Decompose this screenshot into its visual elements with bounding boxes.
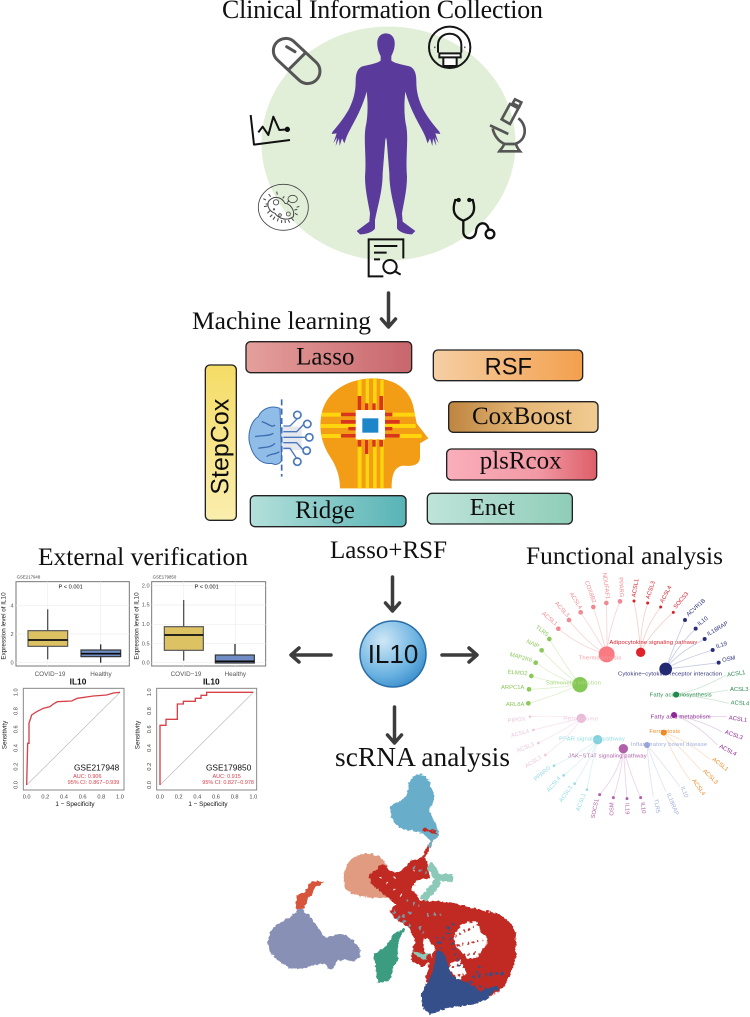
ROC curve: GSE217948 — [2, 677, 124, 808]
cluster: JAK-STAT signaling pathway: IL10 — [639, 802, 646, 815]
icon: document search — [369, 239, 403, 276]
cluster: Inflammatory bowel disease — [631, 742, 707, 816]
icon: microscope — [490, 99, 525, 151]
method: CoxBoost: CoxBoost — [472, 403, 572, 430]
ROC curve: GSE217948: 0.8 — [97, 794, 105, 800]
ROC curve: GSE217948: IL10 — [70, 677, 87, 687]
boxplot: GSE179850: 1.0 — [142, 622, 150, 628]
ROC curve: GSE179850: 0.4 — [193, 794, 201, 800]
ROC curve: GSE217948: 0.6 — [79, 794, 87, 800]
cluster: Salmonella infection: Salmonella infection — [546, 681, 601, 687]
ROC curve: GSE179850: Sensitivity — [134, 720, 141, 749]
ROC curve: GSE217948: 0.6 — [14, 725, 20, 733]
ROC curve: GSE179850: 0.6 — [212, 794, 220, 800]
ROC curve: GSE179850: 95% CI: 0.827−0.978 — [202, 780, 254, 786]
boxplot: GSE179850: 0.0 — [142, 660, 150, 666]
cluster: Fatty acid biosynthesis — [650, 670, 750, 707]
heading: scRNA analysis: scRNA analysis — [335, 742, 510, 772]
cluster: Ferroptosis: ACSL1 — [711, 757, 729, 773]
ROC curve: GSE217948: 0.4 — [14, 744, 20, 752]
ROC curve: GSE179850: 0.0 — [147, 781, 153, 789]
method: plsRcox: plsRcox — [480, 448, 562, 475]
ROC curve: GSE217948: 0.0 — [23, 794, 31, 800]
cluster: dark blue — [422, 950, 497, 1014]
method: StepCox — [205, 365, 236, 520]
cluster: Thermogenesis: NDUFAF1 — [601, 572, 610, 600]
arrow: to external verification — [291, 648, 331, 662]
ROC curve: GSE217948: GSE217948 — [74, 762, 120, 772]
cluster: Peroxisome: ACSL3 — [516, 742, 535, 754]
cluster: Fatty acid biosynthesis: Fatty acid biosynthesis — [650, 692, 712, 698]
boxplot: GSE179850: Healthy — [225, 671, 247, 678]
boxplot: GSE179850: COVID−19 — [171, 671, 202, 678]
cluster: PPAR signaling pathway: ACSL4 — [546, 775, 563, 794]
cluster: top blue — [391, 775, 438, 840]
cluster: PPAR signaling pathway: PPAR signaling pathway — [559, 737, 625, 743]
heading: machine learning: Machine learning — [192, 306, 371, 335]
method: Ridge — [250, 496, 406, 527]
ROC curve: GSE179850: 1 − Specificity — [188, 801, 228, 808]
boxplot: GSE179850: 0.5 — [142, 641, 150, 647]
cluster: Thermogenesis — [540, 572, 624, 662]
cluster: Fatty acid biosynthesis: ACSL3 — [730, 687, 748, 693]
cluster: Salmonella infection: MAP2K6 — [509, 652, 533, 664]
cluster: Cytokine-cytokine receptor interaction: IL18RAP — [706, 621, 730, 638]
cluster: top bridge — [423, 829, 437, 859]
ROC curve: GSE179850: 0.8 — [147, 707, 153, 715]
cluster: Ferroptosis: Ferroptosis — [649, 729, 680, 735]
cluster: Adipocytokine signaling pathway: ACSL4 — [659, 584, 674, 604]
cluster: Fatty acid biosynthesis: ACSL4 — [731, 700, 750, 707]
cluster: Salmonella infection: ARPC1A — [501, 685, 524, 691]
cluster: JAK-STAT signaling pathway: OSM — [610, 802, 616, 816]
ROC curve: GSE217948: 1.0 — [116, 794, 124, 800]
icon: stethoscope — [454, 199, 494, 238]
boxplot: GSE217948: 4 — [11, 603, 14, 609]
cluster: red — [370, 858, 515, 1003]
cluster: Fatty acid metabolism: ACSL4 — [718, 744, 738, 758]
boxplot: GSE179850 — [133, 574, 266, 678]
ROC curve: GSE179850: 0.6 — [147, 725, 153, 733]
ROC curve: GSE217948: 0.2 — [14, 763, 20, 771]
chart: functional enrichment network — [501, 572, 750, 819]
cluster: Salmonella infection: TLR5 — [534, 625, 549, 638]
cluster: Inflammatory bowel disease: TLR5 — [652, 799, 660, 814]
label: Lasso+RSF: Lasso+RSF — [330, 537, 447, 564]
human body silhouette — [332, 33, 440, 234]
cluster: Inflammatory bowel disease: IL10 — [679, 786, 689, 799]
cluster: Inflammatory bowel disease: Inflammatory bowel disease — [631, 742, 707, 748]
method: Ridge: Ridge — [295, 497, 355, 524]
cluster: Peroxisome — [508, 714, 598, 770]
cluster: Thermogenesis: ACSL4 — [568, 592, 583, 611]
node: IL10: IL10 — [368, 639, 418, 669]
cells: dark blue noise — [437, 923, 503, 990]
boxplot: GSE179850: 2.0 — [142, 583, 150, 589]
cluster: JAK-STAT signaling pathway: IL19 — [623, 803, 629, 814]
cluster: peach — [345, 854, 390, 898]
boxplot: GSE179850: Expression level of IL10 — [133, 592, 140, 660]
node: IL10 — [360, 621, 426, 687]
cluster: Adipocytokine signaling pathway: ACSL3 — [646, 581, 657, 600]
cluster: Cytokine-cytokine receptor interaction: ACVR1B — [686, 598, 707, 618]
cluster: Adipocytokine signaling pathway — [609, 578, 697, 657]
method: StepCox: StepCox — [206, 398, 234, 495]
method: Lasso: Lasso — [296, 343, 354, 370]
cluster: PPAR signaling pathway: PPARG — [533, 765, 553, 783]
boxplot: GSE217948: Expression level of IL10 — [1, 592, 8, 660]
chart: UMAP scRNA clusters — [268, 775, 515, 1014]
cluster: Peroxisome: PIPOX — [508, 717, 526, 725]
boxplot: GSE217948: GSE217948 — [17, 574, 41, 579]
ROC curve: GSE179850: 0.0 — [156, 794, 164, 800]
ROC curve: GSE179850: GSE179850 — [206, 762, 252, 772]
cluster: orange-red tail — [297, 882, 323, 908]
ROC curve: GSE179850 — [134, 677, 257, 808]
ROC curve: GSE179850: 1.0 — [249, 794, 257, 800]
ROC curve: GSE217948: Sensitivity — [2, 720, 9, 749]
cluster: Cytokine-cytokine receptor interaction: Cytokine−cytokine receptor interaction — [618, 672, 722, 678]
cluster: Thermogenesis: ACSL3 — [553, 601, 570, 619]
cluster: Fatty acid metabolism: ACSL3 — [724, 730, 743, 742]
boxplot: GSE217948: P < 0.001 — [59, 585, 83, 591]
cluster: Peroxisome: Peroxisome — [563, 717, 598, 723]
cluster: JAK-STAT signaling pathway — [568, 744, 647, 819]
cluster: JAK-STAT signaling pathway: JAK−STAT signaling pathway — [568, 753, 647, 759]
cluster: Ferroptosis: ACSL3 — [701, 769, 719, 786]
cluster: green — [375, 930, 403, 983]
cluster: JAK-STAT signaling pathway: SOCS1 — [591, 798, 601, 819]
boxplot: GSE217948: Healthy — [90, 671, 113, 678]
cluster: Thermogenesis: Thermogenesis — [579, 655, 621, 661]
cluster: Inflammatory bowel disease: IL18RAP — [665, 792, 679, 816]
method: RSF — [433, 350, 583, 381]
icon: AI chip head — [320, 378, 428, 488]
boxplot: GSE179850: 1.5 — [142, 603, 150, 609]
cells: white noise — [380, 870, 420, 900]
ROC curve: GSE217948: 0.8 — [14, 707, 20, 715]
ROC curve: GSE217948: AUC: 0.906 — [73, 774, 102, 780]
cluster: grey blue — [268, 909, 360, 969]
ROC curve: GSE217948: 0.2 — [41, 794, 49, 800]
cluster: Adipocytokine signaling pathway: Adipocytokine signaling pathway — [609, 640, 697, 646]
panel: machine learning methods — [205, 342, 598, 527]
cluster: Ferroptosis: ACSL4 — [690, 778, 706, 798]
method: Enet: Enet — [470, 494, 515, 521]
background circle — [262, 26, 516, 260]
cells: red noise — [452, 923, 483, 977]
cluster: bridge teal — [428, 835, 433, 847]
ROC curve: GSE217948: 1 − Specificity — [55, 801, 95, 808]
method: Enet — [427, 493, 572, 524]
boxplot: GSE179850: GSE179850 — [153, 574, 177, 579]
icon: chart — [251, 115, 290, 145]
boxplot: GSE179850: P < 0.001 — [195, 585, 219, 591]
cluster: PPAR signaling pathway: ACSL3 — [558, 785, 574, 804]
boxplot: GSE217948: 2 — [11, 632, 14, 638]
cluster: Salmonella infection — [501, 625, 601, 708]
boxplot: GSE217948: 0 — [11, 661, 14, 667]
cluster: Adipocytokine signaling pathway: ACSL1 — [631, 578, 641, 598]
method: Lasso — [246, 342, 412, 373]
ROC curve: GSE179850: 1.0 — [147, 688, 153, 696]
boxplot: GSE217948: COVID−19 — [35, 671, 66, 678]
cells: mint patch — [413, 952, 428, 960]
ROC curve: GSE179850: 0.2 — [175, 794, 183, 800]
ROC curve: GSE217948: 0.4 — [60, 794, 68, 800]
cluster: Cytokine-cytokine receptor interaction — [618, 598, 736, 678]
cluster: PPAR signaling pathway — [533, 735, 625, 812]
cluster: Fatty acid metabolism — [651, 712, 748, 758]
method: RSF: RSF — [485, 355, 532, 381]
arrow: clinical to machine learning — [382, 293, 396, 327]
cluster: Salmonella infection: ELMO2 — [507, 670, 528, 677]
cluster: Salmonella infection: NAIP — [525, 639, 540, 650]
ROC curve: GSE179850: AUC: 0.915 — [212, 774, 241, 780]
ROC curve: GSE179850: 0.4 — [147, 744, 153, 752]
cluster: Ferroptosis — [649, 729, 729, 798]
cluster: Fatty acid metabolism: Fatty acid metabolism — [651, 714, 711, 720]
ROC curve: GSE217948: 1.0 — [14, 688, 20, 696]
icon: scanner — [429, 27, 470, 68]
cluster: Fatty acid metabolism: ACSL1 — [728, 715, 748, 724]
cluster: PPAR signaling pathway: ACSL1 — [576, 793, 588, 812]
cluster: Thermogenesis: PPARG — [617, 577, 624, 598]
ROC curve: GSE217948: 0.0 — [14, 781, 20, 789]
arrow: to scRNA analysis — [388, 707, 402, 743]
panel: clinical information circle — [251, 26, 525, 276]
icon: bacteria dish — [258, 184, 308, 230]
ROC curve: GSE179850: IL10 — [203, 677, 220, 687]
icon: brain — [249, 399, 313, 477]
cluster: Peroxisome: ACSL4 — [510, 729, 531, 739]
cluster: Cytokine-cytokine receptor interaction: OSM — [722, 655, 736, 664]
arrow: to functional analysis — [442, 648, 477, 662]
ROC curve: GSE179850: 0.8 — [231, 794, 239, 800]
arrow: Lasso+RSF to IL10 — [386, 577, 400, 611]
cluster: Salmonella infection: ARL8A — [506, 702, 524, 708]
cluster: Thermogenesis: COX8B2 — [583, 580, 596, 604]
heading: external verification: External verification — [38, 542, 248, 571]
method: CoxBoost — [449, 402, 598, 432]
ROC curve: GSE179850: 0.2 — [147, 763, 153, 771]
cluster: Cytokine-cytokine receptor interaction: IL10 — [697, 615, 710, 628]
cluster: Cytokine-cytokine receptor interaction: IL19 — [715, 641, 728, 650]
boxplot: GSE217948 — [1, 574, 129, 678]
heading: functional analysis: Functional analysis — [526, 542, 723, 570]
cluster: mint — [423, 865, 453, 900]
panel: external verification charts — [1, 574, 266, 808]
icon: capsule — [268, 33, 325, 89]
cluster: Fatty acid biosynthesis: ACSL1 — [727, 670, 746, 679]
cluster: Thermogenesis: ACSL1 — [540, 611, 558, 628]
ROC curve: GSE217948: 95% CI: 0.867−0.939 — [68, 780, 119, 786]
cells: white holes — [423, 922, 488, 980]
method: plsRcox — [447, 448, 597, 480]
cells: grey-teal noise — [393, 867, 442, 933]
cluster: Peroxisome: ACSL1 — [524, 755, 543, 770]
cluster: Adipocytokine signaling pathway: SOCS3 — [673, 591, 690, 610]
